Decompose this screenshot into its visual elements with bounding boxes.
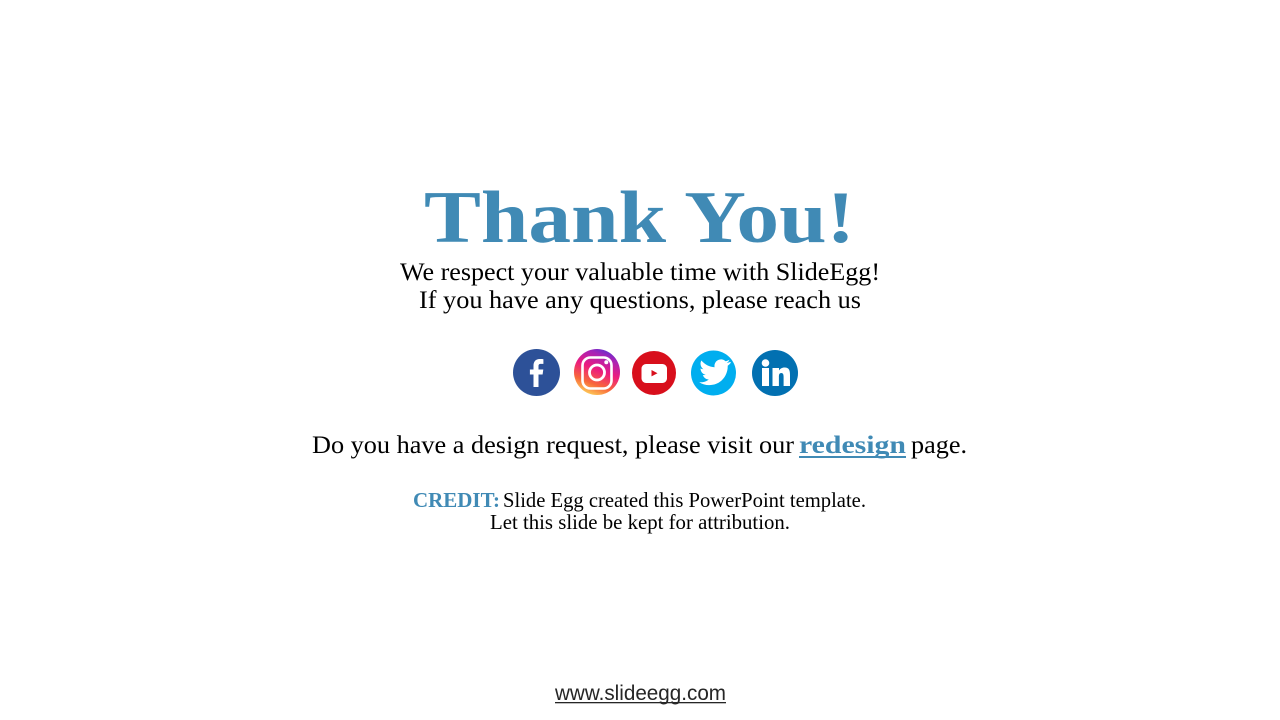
icon: twitter xyxy=(691,350,736,396)
credit text: Slide Egg created this PowerPoint template. xyxy=(503,488,866,512)
intro text xyxy=(400,257,880,314)
icon: facebook xyxy=(513,349,560,396)
icon: youtube xyxy=(632,351,676,395)
social icons xyxy=(513,349,798,396)
title: Thank You! xyxy=(424,177,855,259)
redesign link: redesign xyxy=(799,430,906,459)
icon: linkedin xyxy=(752,350,798,396)
website link: www.slideegg.com xyxy=(554,682,726,705)
intro text: We respect your valuable time with SlideEgg! xyxy=(400,257,880,286)
credit text: Let this slide be kept for attribution. xyxy=(490,510,790,534)
intro text: If you have any questions, please reach us xyxy=(419,285,861,314)
page word: page. xyxy=(911,430,967,459)
credit text xyxy=(490,488,866,534)
design request line: Do you have a design request, please visit our xyxy=(312,430,795,459)
icon: instagram xyxy=(574,349,620,395)
credit label: CREDIT: xyxy=(413,488,500,512)
